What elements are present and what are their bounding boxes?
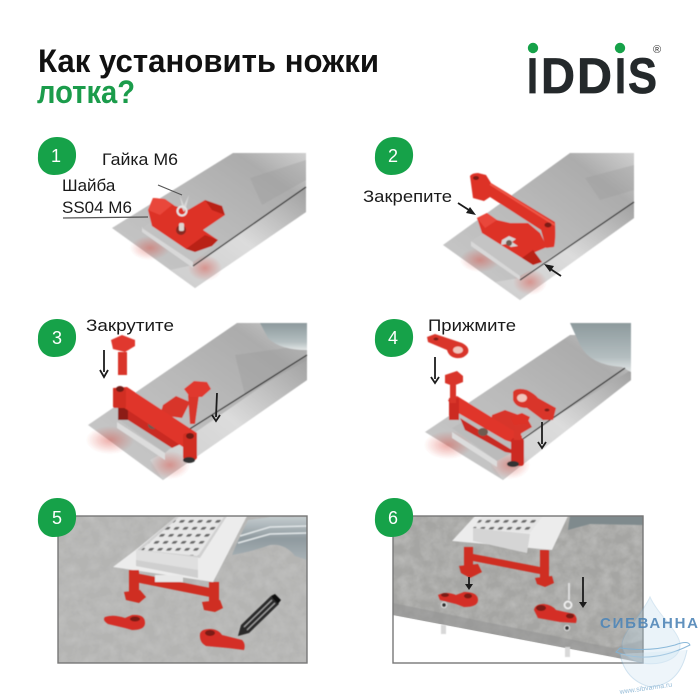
panel: step 3 <box>38 316 307 480</box>
badge 5 <box>38 498 76 537</box>
logo: IDDIS: I <box>527 48 538 104</box>
arrow right <box>544 264 561 276</box>
illustration: clamps <box>424 323 631 480</box>
badge 2: 2 <box>388 146 398 166</box>
label: Прижмите <box>428 316 516 335</box>
logo: IDDIS: ® <box>653 44 661 56</box>
leader lines <box>63 185 182 218</box>
label: Закрутите <box>86 316 174 335</box>
marker washer left <box>104 615 145 630</box>
badge 5: 5 <box>52 508 62 528</box>
frame <box>124 570 223 612</box>
badge 6 <box>375 498 413 537</box>
label: nut: Гайка М6 <box>102 150 178 169</box>
panel: step 2 <box>363 137 634 300</box>
arrow left <box>100 350 108 377</box>
label: washer: SS04 M6 <box>62 198 132 217</box>
icon: wing nut <box>178 195 189 216</box>
icon: pencil <box>238 594 281 636</box>
bar <box>470 173 555 248</box>
screw <box>445 371 463 403</box>
label: washer: Шайба <box>62 176 116 195</box>
title <box>37 43 379 110</box>
panel: step 5 <box>38 498 307 663</box>
marker washer right <box>200 629 245 650</box>
marker washer left <box>438 592 478 607</box>
badge 2 <box>375 137 413 175</box>
arrow left <box>458 203 476 215</box>
photo: concrete slab <box>393 516 643 663</box>
title: Как установить ножки <box>38 43 379 79</box>
logo: IDDIS <box>527 43 661 104</box>
logo: IDDIS: D <box>541 48 575 104</box>
panel: step 1 <box>38 137 306 288</box>
logo: IDDIS: D <box>577 48 612 104</box>
illustration: drain and marks <box>104 516 307 650</box>
clamp right <box>513 389 556 420</box>
badge 4 <box>375 319 413 357</box>
arrow right <box>212 393 220 421</box>
watermark: Sibvanna: СИБВАННА <box>600 615 698 632</box>
clamp top <box>427 334 468 358</box>
illustration: screws <box>86 323 307 480</box>
arrow right <box>579 577 587 608</box>
screw 2 <box>510 413 530 440</box>
badge 1 <box>38 137 76 175</box>
label: Закрепите <box>363 187 452 206</box>
badge 6: 6 <box>388 508 398 528</box>
arrow right <box>538 422 546 448</box>
frame border <box>393 516 643 663</box>
badge 1: 1 <box>51 146 61 166</box>
marker washer right <box>534 604 577 623</box>
panel: step 6 <box>375 498 643 663</box>
logo: IDDIS: S <box>628 48 657 104</box>
screw left <box>111 335 135 375</box>
badge 3 <box>38 319 76 357</box>
illustration: drain with bar <box>443 153 634 300</box>
logo: IDDIS: I <box>615 48 626 104</box>
screw right <box>184 381 211 424</box>
illustration: drain and anchors <box>393 516 643 663</box>
photo: concrete floor <box>58 516 307 663</box>
arrow left <box>431 357 439 383</box>
title: лотка? <box>37 74 135 110</box>
watermark: Sibvanna: www.sibvanna.ru <box>618 682 673 696</box>
panel: step 4 <box>375 316 631 480</box>
badge 3: 3 <box>52 328 62 348</box>
watermark: Sibvanna <box>600 597 698 696</box>
illustration: drain with bracket <box>112 153 306 288</box>
frame border <box>58 516 307 663</box>
badge 4: 4 <box>388 328 398 348</box>
arrow left <box>465 577 473 590</box>
